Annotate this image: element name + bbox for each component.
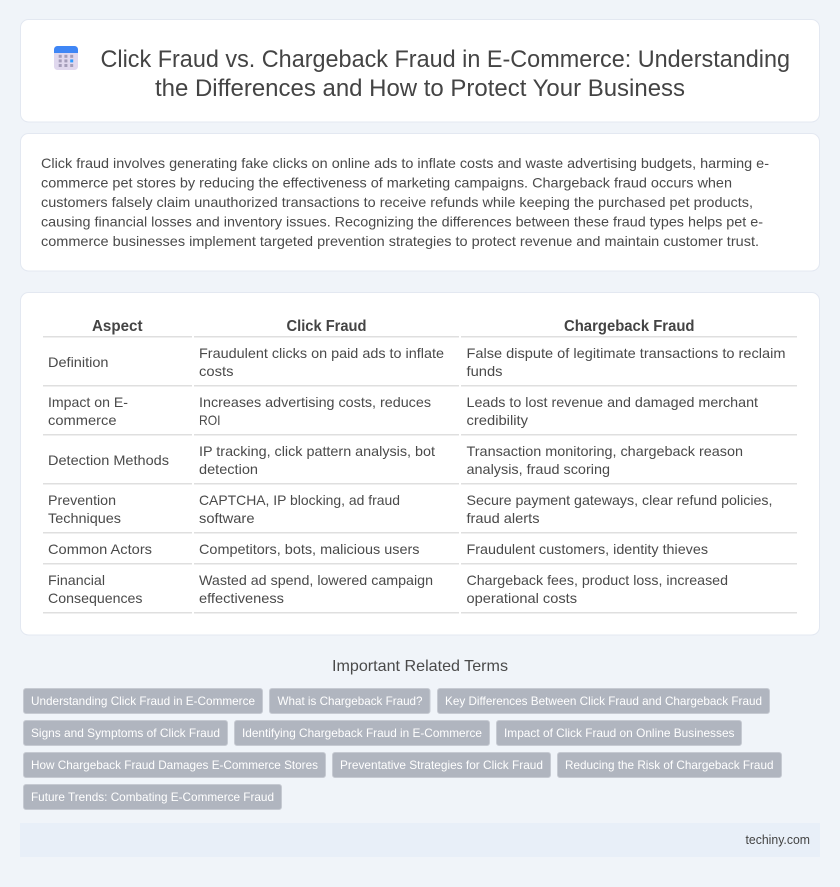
heading: important related terms: Important Related Terms bbox=[332, 658, 508, 675]
title: Click Fraud vs. Chargeback Fraud in E-Commerce: Understanding bbox=[100, 46, 790, 73]
row: common actors: Fraudulent customers, identity thieves bbox=[466, 541, 708, 557]
row: prevention techniques: fraud alerts bbox=[466, 510, 540, 526]
tag: Signs and Symptoms of Click Fraud bbox=[31, 726, 220, 740]
tag bbox=[24, 720, 228, 746]
row: financial consequences: Wasted ad spend, lowered campaign bbox=[199, 572, 433, 588]
panel: title header bbox=[20, 20, 820, 122]
tag bbox=[24, 752, 326, 778]
row: prevention techniques: CAPTCHA, IP blocking, ad fraud bbox=[199, 492, 400, 508]
row: impact on e-commerce: Increases advertising costs, reduces bbox=[199, 394, 431, 410]
tag bbox=[24, 784, 282, 810]
row: prevention techniques: Techniques bbox=[48, 510, 121, 526]
panel: summary paragraph bbox=[20, 134, 820, 271]
tag bbox=[558, 752, 782, 778]
table header row: Chargeback Fraud bbox=[564, 318, 694, 335]
text block: summary: commerce businesses implement targeted prevention strategies to protect revenue and maintain customer trust. bbox=[41, 233, 759, 249]
tag bbox=[438, 688, 770, 714]
row: definition: Definition bbox=[48, 354, 108, 370]
row: impact on e-commerce: Impact on E- bbox=[48, 394, 128, 410]
row: definition bbox=[48, 345, 786, 379]
row: impact on e-commerce: commerce bbox=[48, 412, 117, 428]
row: detection methods: IP tracking, click pattern analysis, bot bbox=[199, 443, 435, 459]
row: definition: False dispute of legitimate transactions to reclaim bbox=[466, 345, 786, 361]
tag: Impact of Click Fraud on Online Businesses bbox=[504, 726, 734, 740]
text block: summary: customers falsely claim unauthorized transactions to receive refunds while keeping the purchased pet products, bbox=[41, 194, 753, 210]
text block: summary: Click fraud involves generating fake clicks on online ads to inflate costs and waste advertising budgets, harming e- bbox=[41, 155, 769, 171]
footer bar bbox=[20, 823, 820, 857]
row: impact on e-commerce: credibility bbox=[466, 412, 528, 428]
icon: calendar bbox=[54, 46, 78, 70]
footer brand text: techiny.com bbox=[746, 832, 810, 847]
text block: summary: causing financial losses and inventory issues. Recognizing the differences between these fraud types helps pet e- bbox=[41, 214, 763, 230]
tag: Future Trends: Combating E-Commerce Fraud bbox=[31, 790, 274, 804]
row: impact on e-commerce: ROI bbox=[199, 412, 220, 428]
row: prevention techniques: Secure payment gateways, clear refund policies, bbox=[466, 492, 772, 508]
row: financial consequences bbox=[48, 572, 728, 606]
panel: comparison table bbox=[20, 292, 820, 635]
row: definition: Fraudulent clicks on paid ads to inflate bbox=[199, 345, 444, 361]
table header row: Aspect bbox=[92, 318, 143, 335]
row: detection methods: analysis, fraud scoring bbox=[466, 461, 610, 477]
row: detection methods: detection bbox=[199, 461, 258, 477]
table header row: Click Fraud bbox=[286, 318, 366, 335]
tag bbox=[270, 688, 430, 714]
row: financial consequences: Financial bbox=[48, 572, 105, 588]
row: financial consequences: Consequences bbox=[48, 590, 142, 606]
row: financial consequences: operational costs bbox=[466, 590, 577, 606]
row: detection methods bbox=[48, 443, 743, 477]
row: impact on e-commerce bbox=[48, 394, 758, 428]
row: financial consequences: effectiveness bbox=[199, 590, 284, 606]
row: detection methods: Detection Methods bbox=[48, 452, 169, 468]
tag: What is Chargeback Fraud? bbox=[278, 694, 423, 708]
tag: Key Differences Between Click Fraud and Chargeback Fraud bbox=[445, 694, 762, 708]
tag: Understanding Click Fraud in E-Commerce bbox=[31, 694, 255, 708]
table header row bbox=[92, 318, 694, 335]
row: detection methods: Transaction monitoring, chargeback reason bbox=[466, 443, 743, 459]
row: definition: funds bbox=[466, 363, 502, 379]
text block: summary bbox=[41, 155, 769, 249]
row: prevention techniques: Prevention bbox=[48, 492, 116, 508]
row: common actors: Competitors, bots, malicious users bbox=[199, 541, 420, 557]
tag: Identifying Chargeback Fraud in E-Commerce bbox=[242, 726, 482, 740]
text block: summary: commerce pet stores by reducing the effectiveness of marketing campaigns. Chargeback fraud occurs when bbox=[41, 174, 732, 190]
row: prevention techniques: software bbox=[199, 510, 255, 526]
tag bbox=[332, 752, 550, 778]
row: financial consequences: Chargeback fees, product loss, increased bbox=[466, 572, 728, 588]
tag: How Chargeback Fraud Damages E-Commerce Stores bbox=[31, 758, 318, 772]
tag bbox=[496, 720, 742, 746]
tag: Reducing the Risk of Chargeback Fraud bbox=[565, 758, 774, 772]
row: impact on e-commerce: Leads to lost revenue and damaged merchant bbox=[466, 394, 758, 410]
tag: Preventative Strategies for Click Fraud bbox=[340, 758, 543, 772]
row: common actors bbox=[48, 541, 708, 557]
title: the Differences and How to Protect Your Business bbox=[155, 75, 685, 102]
tag bbox=[234, 720, 490, 746]
panel: related term tags bbox=[24, 688, 782, 810]
row: definition: costs bbox=[199, 363, 234, 379]
title bbox=[100, 46, 790, 102]
row: common actors: Common Actors bbox=[48, 541, 152, 557]
row: prevention techniques bbox=[48, 492, 772, 526]
tag bbox=[24, 688, 262, 714]
